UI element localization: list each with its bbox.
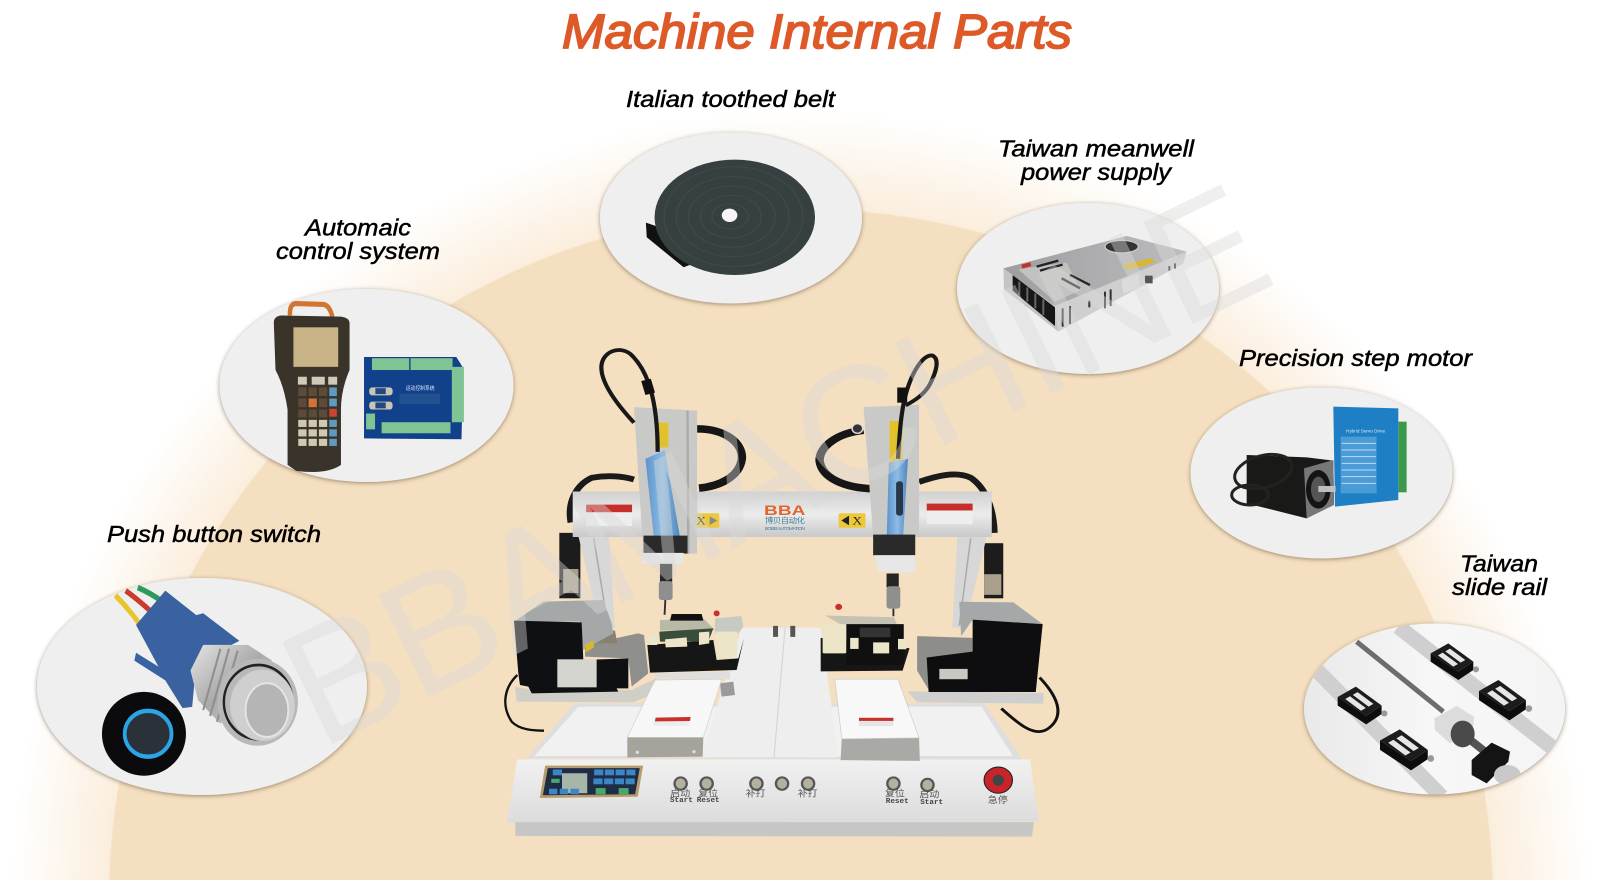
left fixture — [647, 610, 744, 679]
label: precision step motor: Precision step motor — [1239, 345, 1473, 371]
oval: toothed belt — [600, 132, 862, 304]
buttons and labels: 急停 — [988, 795, 1008, 806]
icon: handheld controller and board — [274, 304, 464, 472]
left side cable — [505, 675, 544, 731]
watermark: BBAMACHINE — [255, 148, 1295, 781]
buttons and labels: Reset — [697, 797, 720, 805]
buttons and labels: Start — [670, 797, 693, 805]
right screw feeder — [908, 602, 1043, 704]
title: Machine Internal Parts — [562, 6, 1072, 59]
base front panel — [507, 759, 1039, 837]
right side cable — [1001, 678, 1058, 732]
icon: motor and driver: Hybrid Servo Drive — [1346, 429, 1385, 434]
buttons and labels: 复位 — [698, 788, 719, 800]
label: italian toothed belt: Italian toothed belt — [626, 86, 837, 112]
label: slide rail: slide rail — [1452, 574, 1548, 600]
loose cables behind beam — [570, 474, 994, 533]
oval: push button switch — [37, 578, 367, 795]
label: power supply: power supply — [1020, 159, 1172, 185]
icon: power supply unit — [1003, 236, 1187, 332]
oval: step motor — [1190, 388, 1452, 558]
left screwdriver head — [601, 350, 697, 615]
icon: motor and driver — [1231, 407, 1407, 518]
buttons and labels: 补打 — [746, 788, 766, 800]
panel: italian toothed belt — [600, 86, 862, 304]
gantry beam: BBA — [764, 504, 806, 519]
gantry beam: BOBEI AUTOMATION — [765, 526, 806, 532]
buttons and labels: Reset — [886, 798, 909, 806]
left slide cover — [627, 679, 735, 757]
gantry beam — [573, 492, 992, 537]
gantry beam: X — [852, 514, 862, 527]
gantry beam: X — [696, 514, 706, 527]
buttons and labels: 复位 — [885, 788, 905, 800]
centre pins — [776, 626, 793, 637]
oval: control system — [220, 289, 514, 482]
right slide cover — [835, 679, 920, 761]
machine: dual-head screw fastening robot — [507, 350, 1058, 837]
buttons and labels: 补打 — [798, 788, 818, 800]
gantry legs — [559, 533, 1003, 628]
control panel — [540, 766, 643, 798]
gantry beam: 博贝自动化 — [765, 516, 805, 525]
icon: belt roll — [646, 160, 815, 275]
buttons and labels: 启动 — [919, 789, 939, 800]
label: taiwan meanwell: Taiwan meanwell — [998, 136, 1195, 162]
panel: automatic control system — [220, 214, 514, 482]
panel: push button switch — [37, 521, 367, 795]
icon: linear rails and ball screw — [1315, 627, 1553, 797]
panel: taiwan meanwell power supply — [957, 136, 1219, 374]
buttons and labels — [670, 767, 1012, 807]
oval: slide rail — [1304, 624, 1565, 794]
buttons and labels: Start — [920, 799, 943, 807]
label: control system: control system — [276, 238, 440, 264]
right screwdriver head — [852, 355, 937, 616]
machine: left feeder, fixture and slide — [505, 600, 744, 757]
drag chains — [697, 429, 873, 489]
label: taiwan: Taiwan — [1460, 550, 1538, 576]
right fixture — [821, 604, 909, 671]
icon: handheld controller and board: 运动控制系统 — [406, 383, 435, 392]
table top — [527, 628, 1022, 759]
label: automaic: Automaic — [303, 214, 411, 240]
buttons and labels: 启动 — [670, 788, 690, 800]
icon: push button photo — [102, 587, 298, 776]
label: push button switch: Push button switch — [107, 521, 321, 547]
panel: precision step motor — [1190, 345, 1473, 558]
oval: power supply — [957, 203, 1219, 374]
panel: taiwan slide rail — [1304, 550, 1565, 797]
left screw feeder — [514, 600, 657, 702]
